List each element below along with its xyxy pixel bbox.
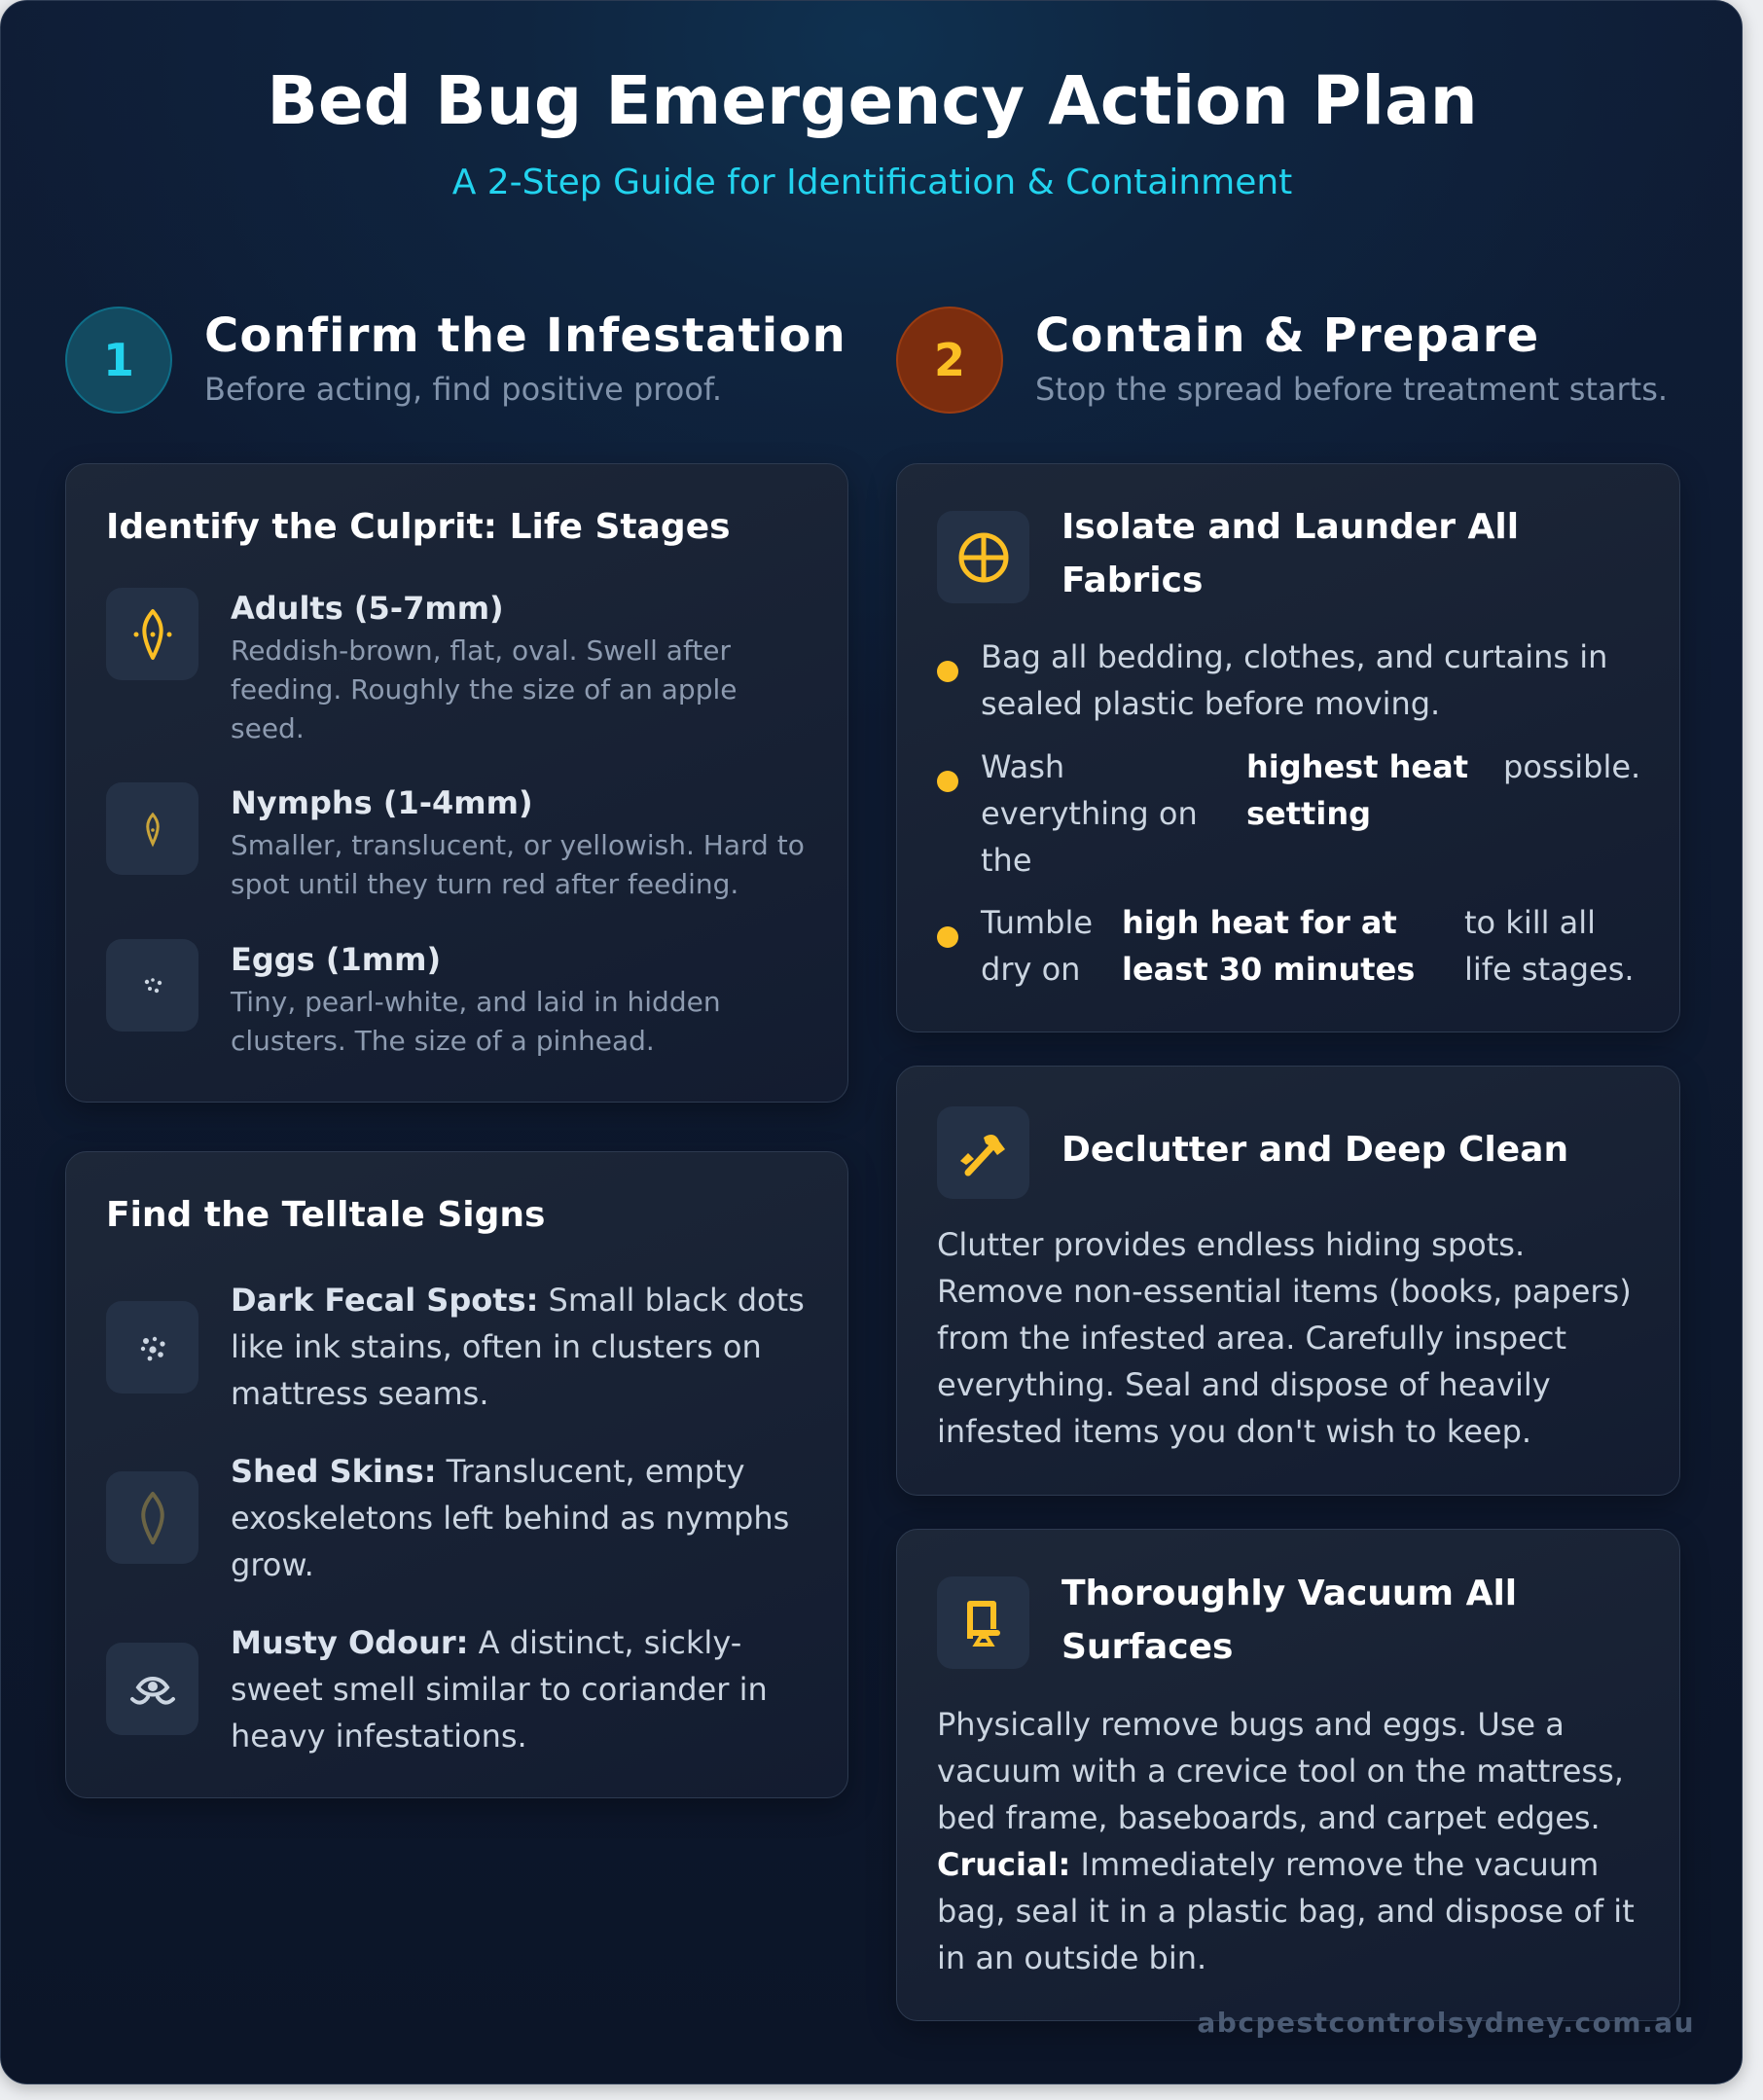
icon: vacuum bbox=[937, 1576, 1029, 1669]
bullet 2: the bbox=[981, 842, 1032, 879]
item: shed skins: exoskeletons left behind as nymphs bbox=[231, 1500, 789, 1537]
item: musty odour bbox=[231, 1624, 768, 1755]
item: musty odour: Musty Odour: A distinct, sickly- bbox=[231, 1624, 741, 1661]
body text: from the infested area. Carefully inspect bbox=[937, 1320, 1566, 1357]
panel title: Find the Telltale Signs bbox=[106, 1195, 545, 1235]
step 1 heading: Before acting, find positive proof. bbox=[204, 371, 722, 408]
body text: Remove non-essential items (books, papers) bbox=[937, 1273, 1632, 1310]
icon: shed skin bbox=[106, 1471, 198, 1564]
item: shed skins: Shed Skins: Translucent, empty bbox=[231, 1453, 745, 1490]
body text bbox=[937, 1226, 1632, 1450]
item: fecal spots bbox=[231, 1282, 805, 1412]
body text: Physically remove bugs and eggs. Use a bbox=[937, 1706, 1565, 1743]
bullet 3: high heat for at bbox=[1122, 904, 1397, 941]
watermark: abcpestcontrolsydney.com.au bbox=[1197, 2007, 1695, 2039]
body text: infested items you don't wish to keep. bbox=[937, 1413, 1531, 1450]
item: musty odour: sweet smell similar to coriander in bbox=[231, 1671, 768, 1708]
item: nymphs: spot until they turn red after feeding. bbox=[231, 868, 738, 900]
item: adults: seed. bbox=[231, 712, 305, 744]
panel: declutter bbox=[896, 1066, 1680, 1496]
title: Bed Bug Emergency Action Plan bbox=[267, 62, 1478, 140]
body text: Clutter provides endless hiding spots. bbox=[937, 1226, 1525, 1263]
card title: Declutter and Deep Clean bbox=[1061, 1130, 1568, 1170]
step 2 heading: Stop the spread before treatment starts. bbox=[1035, 371, 1668, 408]
icon: eggs bbox=[106, 939, 198, 1032]
card title: Surfaces bbox=[1061, 1627, 1233, 1667]
step 2 badge: 2 bbox=[934, 334, 965, 386]
bullet 2: setting bbox=[1246, 795, 1371, 832]
card title: Thoroughly Vacuum All bbox=[1061, 1574, 1517, 1613]
step 2 heading bbox=[1035, 308, 1668, 408]
item: shed skins bbox=[231, 1453, 789, 1583]
item: fecal spots: like ink stains, often in clusters on bbox=[231, 1328, 762, 1365]
item: eggs: Tiny, pearl-white, and laid in hidden bbox=[231, 986, 721, 1018]
card title bbox=[1061, 1574, 1517, 1667]
item: eggs: Eggs (1mm) bbox=[231, 941, 441, 978]
step 1 heading: Confirm the Infestation bbox=[204, 308, 846, 363]
icon: hammer bbox=[937, 1106, 1029, 1199]
bullet 2 bbox=[937, 748, 1640, 879]
body text bbox=[937, 1706, 1635, 1976]
bullet 2: highest heat bbox=[1246, 748, 1468, 785]
icon: odour bbox=[106, 1643, 198, 1735]
item: shed skins: grow. bbox=[231, 1546, 314, 1583]
item: adults bbox=[231, 590, 737, 744]
body text: Crucial: Immediately remove the vacuum bbox=[937, 1846, 1599, 1883]
icon: nymph bbox=[106, 782, 198, 875]
panel: telltale signs bbox=[65, 1151, 848, 1798]
panel: vacuum bbox=[896, 1529, 1680, 2021]
body text: everything. Seal and dispose of heavily bbox=[937, 1366, 1551, 1403]
item: nymphs bbox=[231, 784, 805, 900]
item: adults: feeding. Roughly the size of an apple bbox=[231, 673, 737, 706]
step 2 badge bbox=[896, 307, 1003, 414]
body text: bed frame, baseboards, and carpet edges. bbox=[937, 1799, 1601, 1836]
icon: laundry bbox=[937, 511, 1029, 603]
bullet 2: everything on bbox=[981, 795, 1198, 832]
bullet 1: sealed plastic before moving. bbox=[981, 685, 1440, 722]
step 1 badge bbox=[65, 307, 172, 414]
panel: isolate and launder bbox=[896, 463, 1680, 1032]
panel title: Identify the Culprit: Life Stages bbox=[106, 507, 731, 547]
bullet 2: Wash bbox=[981, 748, 1064, 785]
bullet 3: to kill all bbox=[1464, 904, 1596, 941]
item: eggs: clusters. The size of a pinhead. bbox=[231, 1025, 655, 1057]
body text: vacuum with a crevice tool on the mattress, bbox=[937, 1753, 1624, 1790]
bullet 1 bbox=[937, 638, 1607, 722]
item: nymphs: Nymphs (1-4mm) bbox=[231, 784, 533, 821]
item: adults: Adults (5-7mm) bbox=[231, 590, 504, 627]
item: musty odour: heavy infestations. bbox=[231, 1718, 527, 1755]
bullet 3: Tumble bbox=[981, 904, 1093, 941]
body text: bag, seal it in a plastic bag, and dispose of it bbox=[937, 1893, 1635, 1930]
bullet 2: possible. bbox=[1503, 748, 1640, 785]
bullet 3: dry on bbox=[981, 951, 1080, 988]
bullet 1: Bag all bedding, clothes, and curtains in bbox=[981, 638, 1607, 675]
item: fecal spots: mattress seams. bbox=[231, 1375, 489, 1412]
icon: adult bug bbox=[106, 588, 198, 680]
step 2 heading: Contain & Prepare bbox=[1035, 308, 1539, 363]
item: eggs bbox=[230, 941, 721, 1057]
bullet 3: life stages. bbox=[1464, 951, 1635, 988]
card title: Fabrics bbox=[1061, 561, 1203, 600]
subtitle: A 2-Step Guide for Identification & Containment bbox=[452, 163, 1292, 202]
panel: life stages bbox=[65, 463, 848, 1103]
item: adults: Reddish-brown, flat, oval. Swell after bbox=[231, 634, 731, 667]
item: fecal spots: Dark Fecal Spots: Small black dots bbox=[231, 1282, 805, 1319]
step 1 badge: 1 bbox=[103, 334, 134, 386]
card title: Isolate and Launder All bbox=[1061, 507, 1519, 547]
bullet 3 bbox=[937, 904, 1635, 988]
body text: in an outside bin. bbox=[937, 1939, 1206, 1976]
icon: fecal spots bbox=[106, 1301, 198, 1394]
item: nymphs: Smaller, translucent, or yellowish. Hard to bbox=[231, 829, 805, 861]
step 1 heading bbox=[204, 308, 846, 408]
card title bbox=[1061, 507, 1519, 600]
bullet 3: least 30 minutes bbox=[1122, 951, 1415, 988]
